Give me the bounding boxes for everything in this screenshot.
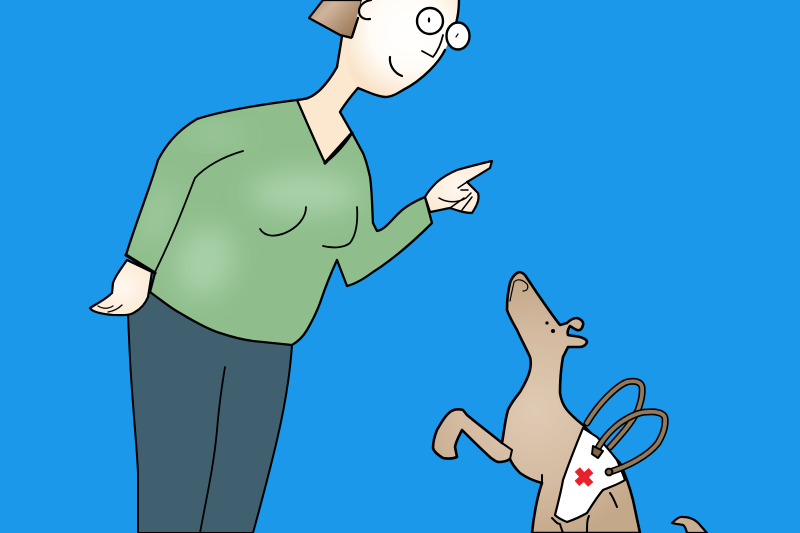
sweater fold lines xyxy=(155,151,357,272)
nose xyxy=(446,22,470,50)
front handle xyxy=(592,412,665,475)
sweater xyxy=(126,100,432,345)
red cross xyxy=(570,463,598,491)
figure: woman xyxy=(90,0,492,533)
neck xyxy=(297,36,400,163)
nose bridge xyxy=(422,35,443,57)
figure: dog xyxy=(433,272,707,533)
tail xyxy=(672,517,707,533)
first-aid harness xyxy=(555,428,625,522)
nose lines and eyes xyxy=(510,280,555,333)
trousers xyxy=(128,292,292,533)
head xyxy=(348,0,470,97)
dog body xyxy=(433,272,640,533)
neck outline xyxy=(297,36,358,133)
ear xyxy=(359,0,371,19)
smile xyxy=(390,57,402,76)
limb lines xyxy=(502,443,617,533)
eye xyxy=(417,8,443,34)
left hand xyxy=(90,260,152,315)
back handle xyxy=(587,381,642,447)
hair xyxy=(309,0,362,38)
pointing hand xyxy=(425,161,492,213)
illustration: woman instructing a first-aid dog xyxy=(88,0,708,533)
